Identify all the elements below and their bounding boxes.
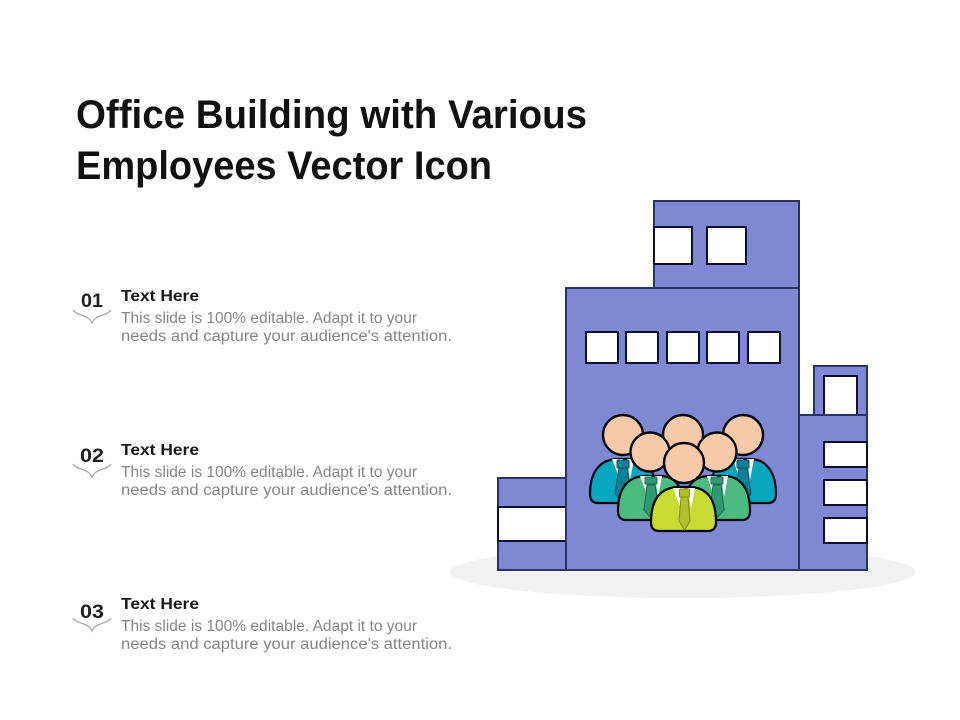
title: Employees Vector Icon xyxy=(76,144,492,188)
employee: back right xyxy=(710,415,776,503)
body text 03 xyxy=(121,618,452,653)
list item 03 xyxy=(73,596,452,653)
body text 01: This slide is 100% editable. Adapt it to your xyxy=(121,310,417,327)
employee: middle right xyxy=(684,432,750,520)
employee: back centre xyxy=(663,415,703,455)
body text 03: This slide is 100% editable. Adapt it to your xyxy=(121,618,417,635)
building: main block xyxy=(566,288,799,570)
building: right chimney block xyxy=(814,366,867,415)
title xyxy=(76,93,587,188)
icon: speech bracket 02 xyxy=(73,464,111,477)
list item 01 xyxy=(73,288,452,345)
heading 02: Text Here xyxy=(121,442,199,459)
body text 01 xyxy=(121,310,452,345)
icon: speech bracket 01 xyxy=(73,310,111,323)
building: top tower xyxy=(654,201,799,288)
employee: middle left xyxy=(618,432,684,520)
ground shadow xyxy=(450,546,916,598)
employees group icon xyxy=(590,415,776,531)
number 01: 01 xyxy=(81,291,103,312)
number 03: 03 xyxy=(80,602,104,623)
title: Office Building with Various xyxy=(76,93,587,137)
icon: speech bracket 03 xyxy=(73,618,111,631)
body text 03: needs and capture your audience's attention. xyxy=(121,636,452,653)
body text 02 xyxy=(121,464,452,499)
office building illustration xyxy=(498,201,867,570)
employee: back left xyxy=(590,415,656,503)
heading 01: Text Here xyxy=(121,288,199,305)
list item 02 xyxy=(73,442,452,499)
heading 03: Text Here xyxy=(121,596,199,613)
body text 02: needs and capture your audience's attention. xyxy=(121,482,452,499)
employee: front centre xyxy=(651,443,716,531)
number 02: 02 xyxy=(80,446,104,467)
building: left wing xyxy=(498,478,566,570)
building: right wing xyxy=(799,415,867,570)
body text 02: This slide is 100% editable. Adapt it to your xyxy=(121,464,417,481)
body text 01: needs and capture your audience's attention. xyxy=(121,328,452,345)
